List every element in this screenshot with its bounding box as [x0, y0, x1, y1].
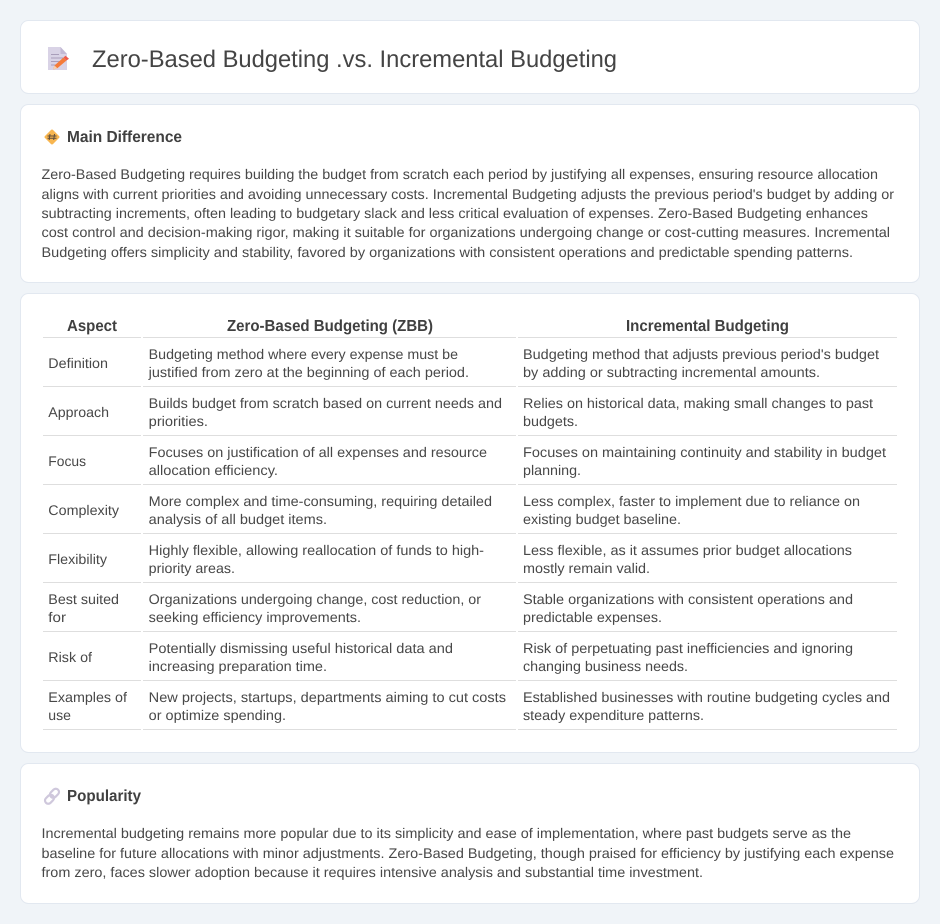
- panel: title: [20, 20, 920, 94]
- row: definition: by adding or subtracting incremental amounts.: [523, 364, 820, 380]
- row: examples of use: [43, 689, 897, 730]
- panel: main difference: [20, 104, 920, 282]
- row: focus: Focus: [48, 453, 86, 469]
- icon: link: [44, 787, 60, 805]
- row: focus: Focuses on maintaining continuity and stability in budget: [523, 444, 886, 460]
- text block: main difference: Zero-Based Budgeting requires building the budget from scratch each period by justifying all expenses, ensuring resource allocation: [42, 166, 878, 182]
- row: flexibility: Highly flexible, allowing reallocation of funds to high-: [149, 542, 484, 558]
- row: risk of: Risk of: [48, 649, 92, 665]
- text block: popularity: baseline for future allocations with minor adjustments. Zero-Based Budgeting, though praised for efficiency by justifying each expense: [42, 845, 894, 861]
- row: examples of use: or optimize spending.: [149, 707, 286, 723]
- row: examples of use: Examples of: [48, 689, 127, 705]
- row: best suited for: predictable expenses.: [523, 609, 662, 625]
- row: best suited for: [43, 591, 897, 632]
- row: risk of: Risk of perpetuating past inefficiencies and ignoring: [523, 640, 853, 656]
- row: approach: Builds budget from scratch based on current needs and: [149, 395, 502, 411]
- row: focus: Focuses on justification of all expenses and resource: [149, 444, 487, 460]
- row: flexibility: [43, 542, 897, 583]
- table header row: Incremental Budgeting: [626, 318, 789, 335]
- row: best suited for: Stable organizations with consistent operations and: [523, 591, 853, 607]
- title: Zero-Based Budgeting .vs. Incremental Budgeting: [92, 46, 617, 73]
- row: flexibility: priority areas.: [149, 560, 235, 576]
- row: best suited for: Best suited: [48, 591, 119, 607]
- row: examples of use: New projects, startups, departments aiming to cut costs: [149, 689, 506, 705]
- row: examples of use: use: [48, 707, 71, 723]
- row: complexity: existing budget baseline.: [523, 511, 681, 527]
- row: flexibility: Flexibility: [48, 551, 107, 567]
- row: definition: justified from zero at the beginning of each period.: [148, 364, 469, 380]
- icon: warning diamond: [44, 129, 60, 145]
- row: definition: [43, 346, 897, 387]
- text block: main difference: subtracting increments, often leading to budgetary slack and less critical evaluation of expenses. Zero-Based Budgeting enhances: [42, 205, 868, 221]
- icon: memo and pencil: [48, 47, 69, 70]
- row: approach: budgets.: [523, 413, 578, 429]
- row: examples of use: Established businesses with routine budgeting cycles and: [523, 689, 890, 705]
- table header row: [43, 318, 897, 338]
- row: approach: Approach: [48, 404, 109, 420]
- row: focus: planning.: [523, 462, 581, 478]
- row: best suited for: Organizations undergoing change, cost reduction, or: [149, 591, 481, 607]
- row: approach: [43, 395, 897, 436]
- row: complexity: analysis of all budget items.: [149, 511, 327, 527]
- panel: comparison table: [20, 294, 920, 752]
- text block: main difference: cost control and decision-making rigor, making it suitable for organizations undergoing change or cost-cutting measures. Incremental: [42, 224, 890, 240]
- row: risk of: increasing preparation time.: [149, 658, 327, 674]
- row: best suited for: seeking efficiency improvements.: [149, 609, 361, 625]
- row: definition: Budgeting method that adjusts previous period's budget: [523, 346, 879, 362]
- row: approach: Relies on historical data, making small changes to past: [523, 395, 873, 411]
- text block: main difference: Budgeting offers simplicity and stability, favored by organizations with consistent operations and predictable spending patterns.: [42, 244, 853, 260]
- text block: popularity: Incremental budgeting remains more popular due to its simplicity and ease of implementation, where past budgets serve as the: [42, 825, 851, 841]
- row: focus: [43, 444, 897, 485]
- row: flexibility: mostly remain valid.: [523, 560, 650, 576]
- row: complexity: Less complex, faster to implement due to reliance on: [523, 493, 860, 509]
- row: examples of use: steady expenditure patterns.: [523, 707, 704, 723]
- row: risk of: Potentially dismissing useful historical data and: [149, 640, 453, 656]
- row: approach: priorities.: [149, 413, 208, 429]
- text block: popularity: [42, 825, 894, 880]
- row: complexity: More complex and time-consuming, requiring detailed: [149, 493, 492, 509]
- row: complexity: [43, 493, 897, 534]
- row: best suited for: for: [48, 609, 66, 625]
- row: flexibility: Less flexible, as it assumes prior budget allocations: [523, 542, 852, 558]
- table header row: Zero-Based Budgeting (ZBB): [227, 318, 433, 335]
- text block: main difference: aligns with current priorities and avoiding unnecessary costs. Incremental Budgeting adjusts the previous period's budget by adding or: [42, 186, 894, 202]
- panel: popularity: [20, 764, 920, 904]
- text block: main difference: [42, 166, 894, 260]
- row: focus: allocation efficiency.: [149, 462, 278, 478]
- row: definition: Budgeting method where every expense must be: [149, 346, 458, 362]
- row: risk of: changing business needs.: [523, 658, 688, 674]
- row: definition: Definition: [48, 355, 108, 371]
- row: complexity: Complexity: [48, 502, 119, 518]
- row: risk of: [43, 640, 897, 681]
- heading: popularity: Popularity: [67, 788, 141, 805]
- heading: main difference: Main Difference: [67, 129, 182, 146]
- text block: popularity: from zero, faces slower adoption because it requires intensive analysis and substantial time investment.: [42, 864, 703, 880]
- table header row: Aspect: [67, 318, 118, 335]
